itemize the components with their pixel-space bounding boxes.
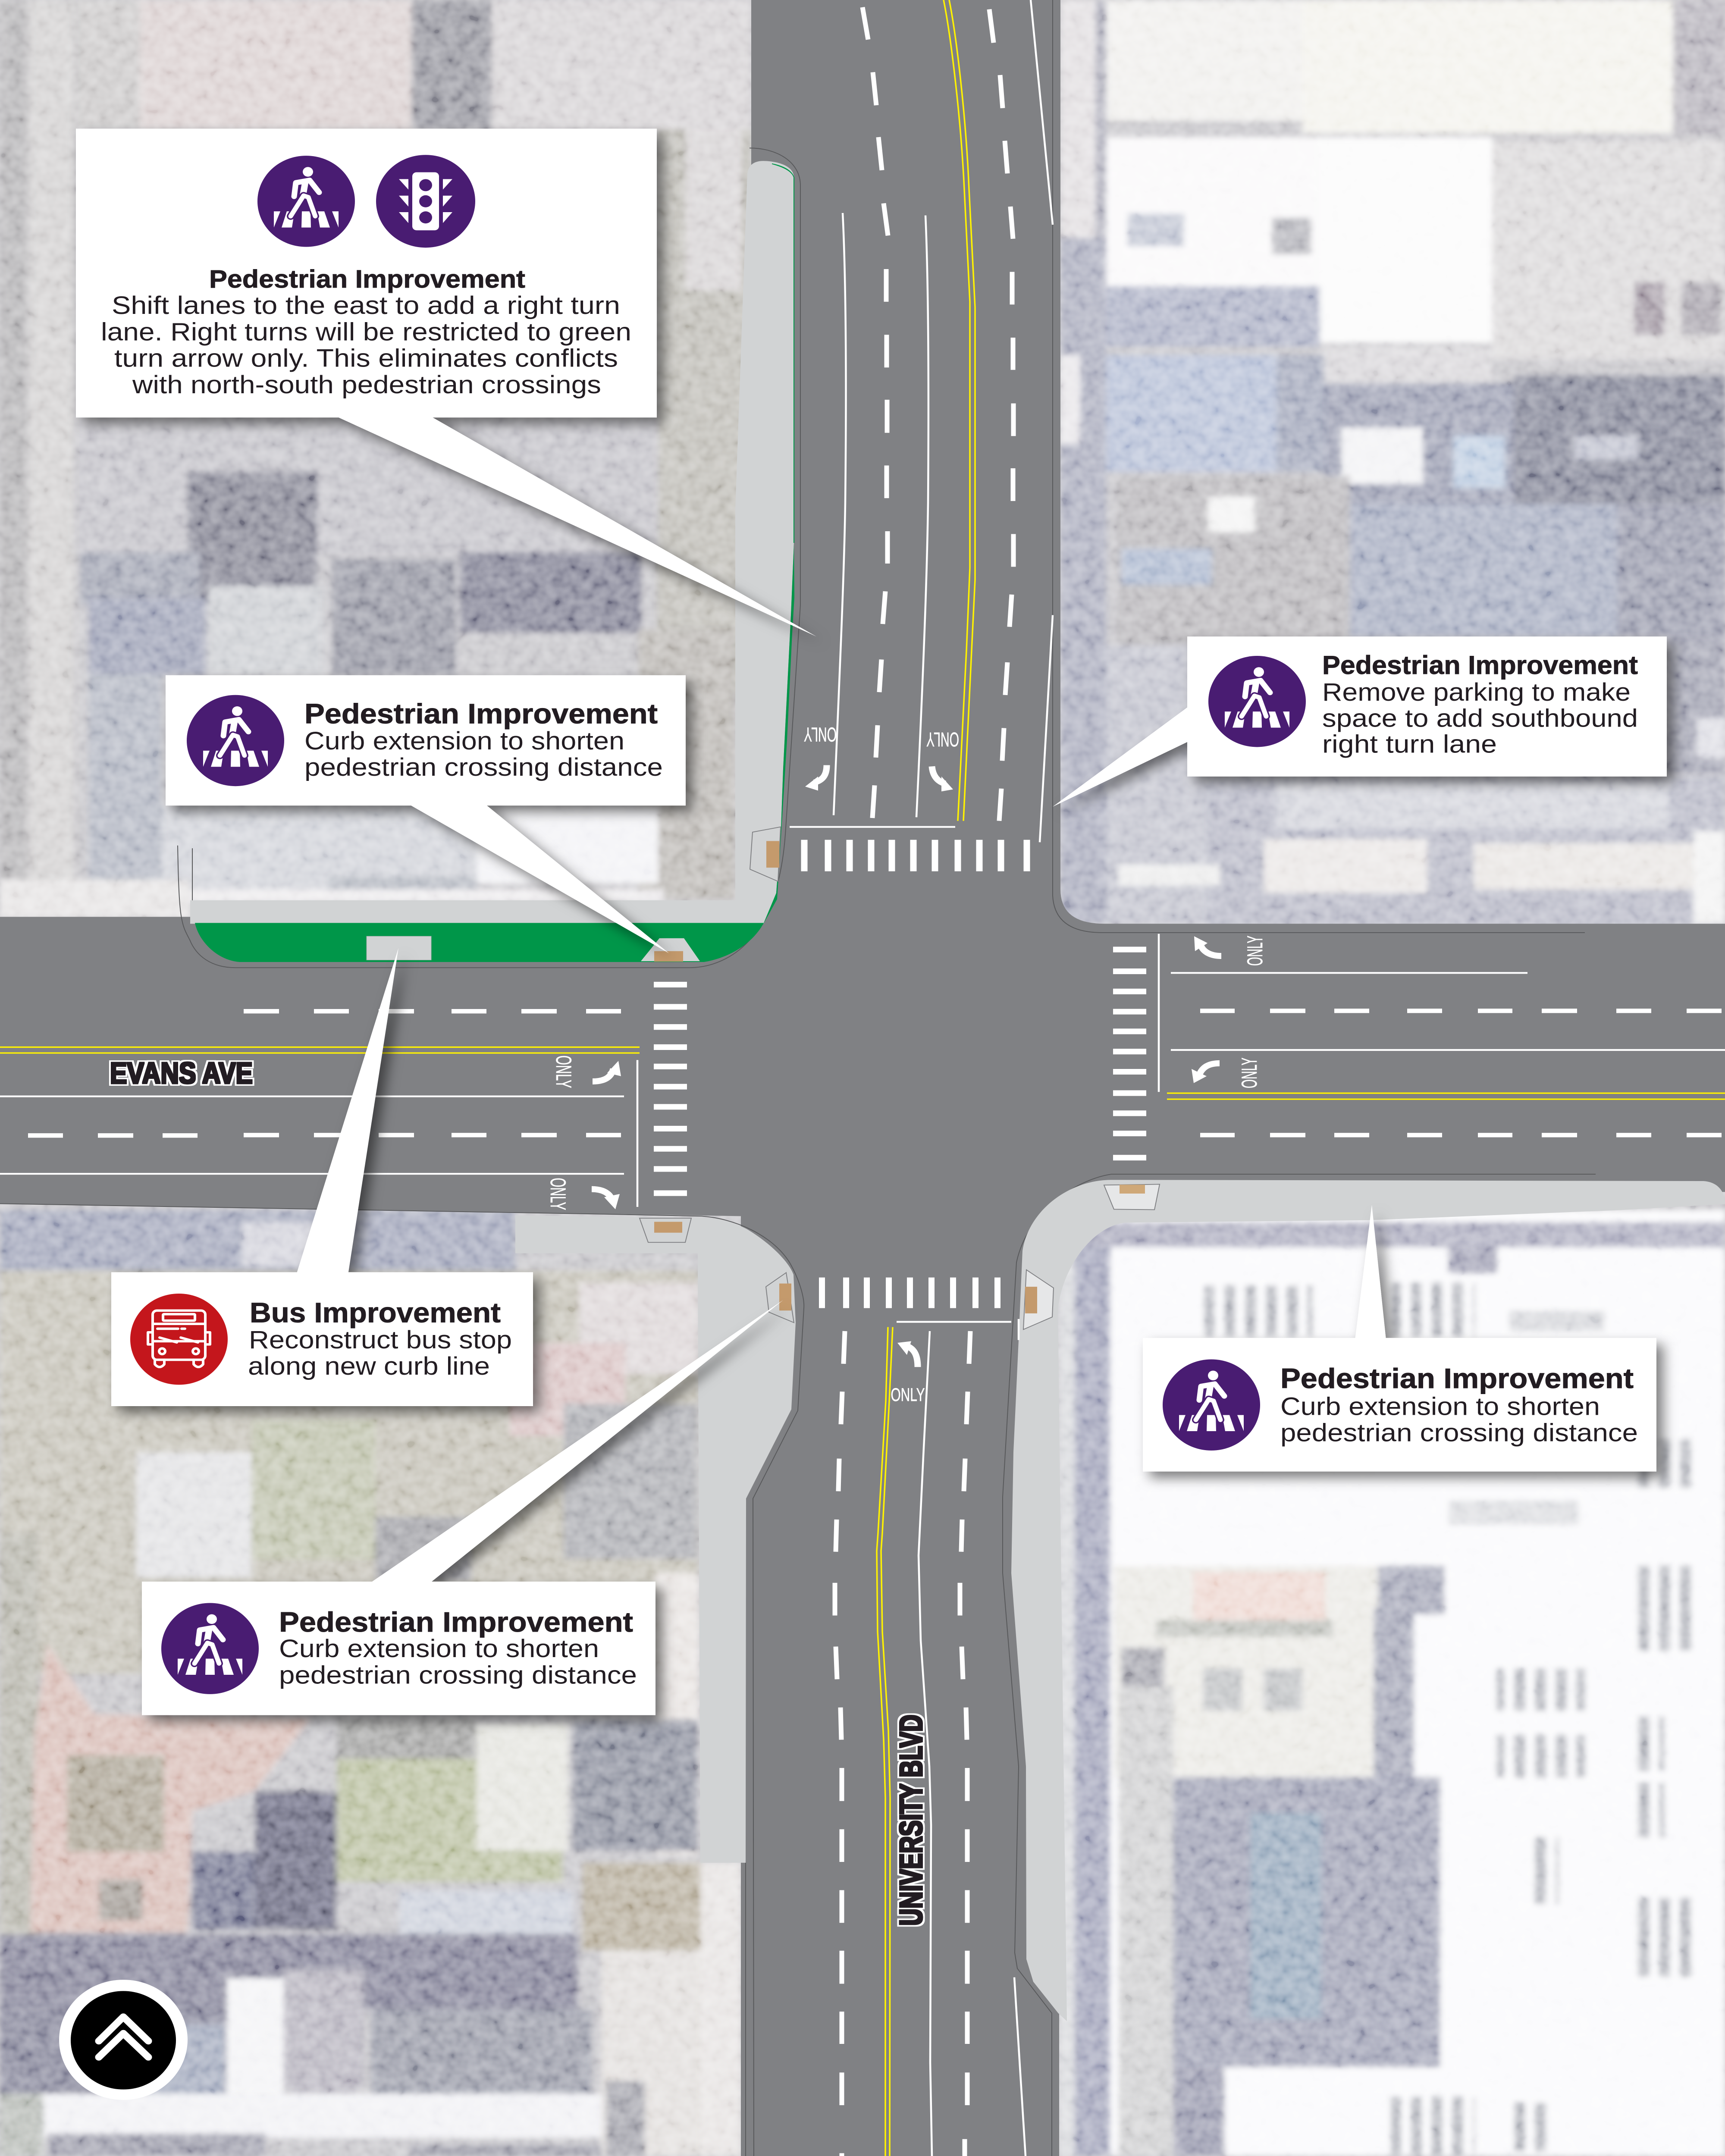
pedestrian ramps [640,827,1160,1329]
icon: pedestrian crossing [1208,656,1306,747]
callout: remove parking [1053,636,1667,807]
icon: pedestrian crossing [161,1603,259,1694]
description: pedestrian crossing distance [1280,1419,1638,1447]
callout: curb extension southwest [142,1300,783,1715]
street label: University Blvd: UNIVERSITY BLVD [894,1715,929,1926]
description: with north-south pedestrian crossings [132,371,601,399]
description: Curb extension to shorten [304,727,624,755]
description [279,1635,637,1689]
ONLY pavement labels: ONLY [804,723,837,746]
description: right turn lane [1322,730,1497,758]
description: Curb extension to shorten [1280,1392,1600,1420]
green curb extension [195,163,794,962]
callout: curb extension northwest [166,675,686,953]
crosswalk bars [654,840,1146,1308]
ONLY pavement labels: ONLY [546,1178,570,1210]
description: pedestrian crossing distance [304,753,663,781]
icon: back to top button [59,1980,188,2100]
description: lane. Right turns will be restricted to green [101,318,631,346]
ONLY pavement labels: ONLY [891,1385,925,1405]
description [1280,1392,1638,1447]
description: space to add southbound [1322,705,1638,732]
description [248,1326,512,1380]
callout: bus improvement [111,948,533,1406]
description: Remove parking to make [1322,678,1631,706]
street label: Evans Ave: EVANS AVE [110,1057,253,1090]
description [304,727,663,781]
icon: pedestrian crossing [257,156,355,247]
description [1322,678,1638,758]
heading: Bus Improvement [250,1297,501,1329]
description: turn arrow only. This eliminates conflicts [114,344,618,372]
icon: bus [130,1294,228,1385]
callout: shift lanes, right turn lane [76,128,816,636]
icon: pedestrian crossing [187,695,284,786]
icon: traffic signal [376,155,475,248]
ONLY pavement labels: ONLY [552,1056,575,1088]
heading: Pedestrian Improvement [304,699,658,730]
description: pedestrian crossing distance [279,1661,637,1689]
heading: Pedestrian Improvement [209,265,525,293]
description: Reconstruct bus stop [249,1326,512,1354]
sidewalk: southeast corner [1011,1180,1725,2021]
description: Shift lanes to the east to add a right turn [112,291,620,319]
ONLY pavement labels: ONLY [926,728,959,750]
description: along new curb line [248,1352,490,1380]
icon: pedestrian crossing [1163,1359,1260,1451]
ONLY pavement labels: ONLY [1238,1058,1261,1088]
heading: Pedestrian Improvement [1322,651,1638,680]
ONLY pavement labels [546,723,1267,1405]
description [101,291,631,399]
sidewalk: northwest corner [190,161,794,924]
bus stop pad [367,936,431,960]
callout: curb extension southeast [1143,1205,1656,1472]
ONLY pavement labels: ONLY [1243,936,1267,966]
sidewalk: southwest corner [515,1216,796,1863]
turn arrows [592,765,1221,1367]
heading: Pedestrian Improvement [1280,1363,1634,1394]
description: Curb extension to shorten [279,1635,599,1662]
heading: Pedestrian Improvement [279,1607,633,1638]
